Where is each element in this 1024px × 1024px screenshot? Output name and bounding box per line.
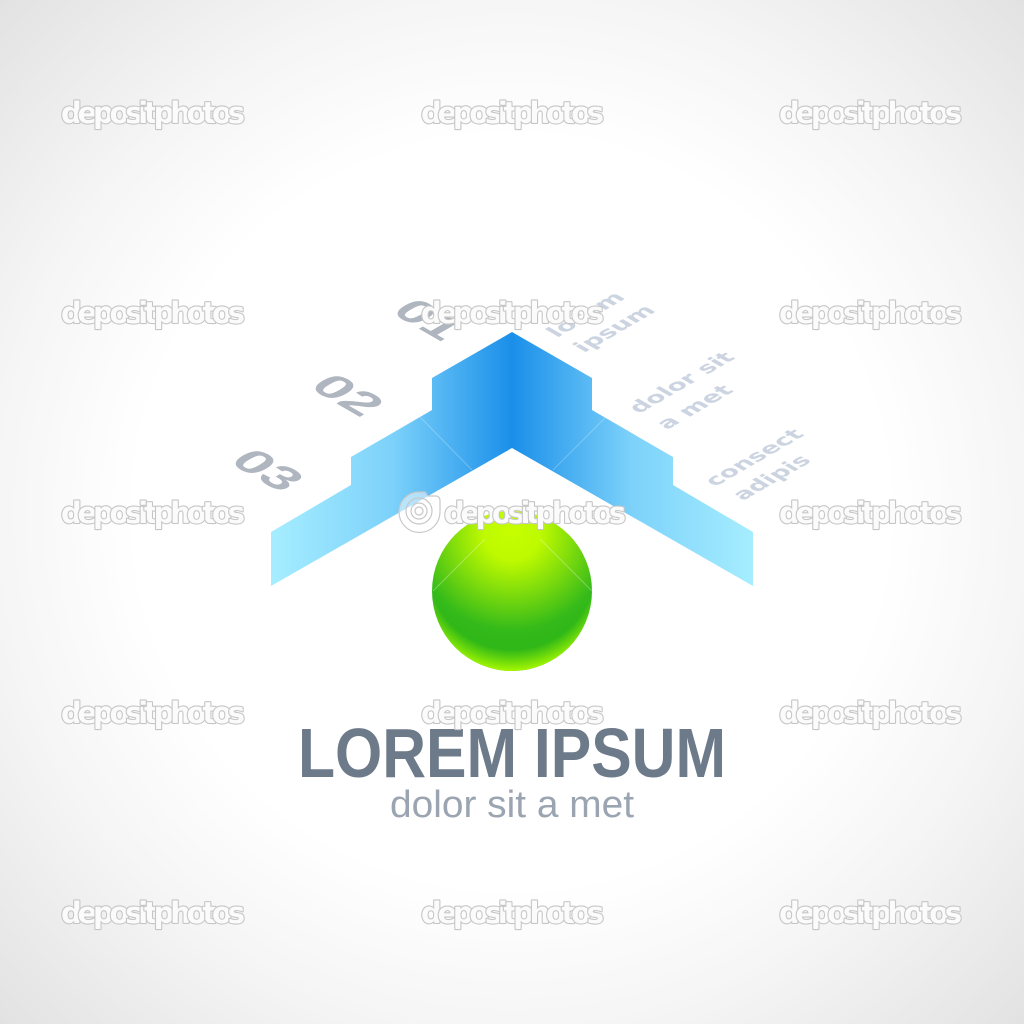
- watermarks: depositphotos: [779, 496, 962, 530]
- watermarks: depositphotos: [421, 296, 604, 330]
- icon: watermark camera: [399, 492, 440, 532]
- sphere left highlight line: [433, 539, 485, 591]
- label ipsum line: ipsum: [568, 301, 661, 356]
- watermarks: depositphotos: [61, 896, 245, 930]
- label consect: consect: [699, 425, 809, 490]
- number 02: 02: [299, 367, 395, 423]
- left fold line: [420, 417, 472, 470]
- number 03: 03: [219, 442, 315, 498]
- label a met: a met: [651, 381, 739, 433]
- label adipis: adipis: [727, 451, 817, 504]
- watermarks: depositphotos: [61, 96, 245, 130]
- right fold line: [553, 418, 605, 470]
- subtitle: dolor sit a met: [390, 784, 634, 826]
- label lorem ipsum: lorem: [541, 288, 631, 341]
- house roof chevron: [271, 332, 753, 586]
- watermarks: depositphotos: [61, 696, 245, 730]
- watermarks: depositphotos: [779, 296, 962, 330]
- watermarks: [61, 96, 962, 930]
- step labels: [541, 288, 817, 504]
- watermarks: depositphotos: [61, 496, 245, 530]
- roof shape: [271, 332, 753, 586]
- watermarks: depositphotos: [779, 96, 962, 130]
- watermarks: depositphotos: [421, 696, 604, 730]
- title: LOREM IPSUM: [298, 714, 726, 792]
- step numbers: [219, 292, 476, 498]
- watermarks: depositphotos: [779, 696, 962, 730]
- watermarks: depositphotos: [61, 296, 245, 330]
- watermarks: depositphotos: [421, 96, 604, 130]
- watermarks: depositphotos: [421, 896, 604, 930]
- watermarks: depositphotos: [444, 496, 626, 530]
- watermarks: depositphotos: [779, 896, 962, 930]
- green sphere: [432, 511, 592, 671]
- number 01: 01: [381, 292, 476, 347]
- sphere right highlight line: [540, 539, 592, 591]
- label dolor sit: dolor sit: [623, 348, 740, 417]
